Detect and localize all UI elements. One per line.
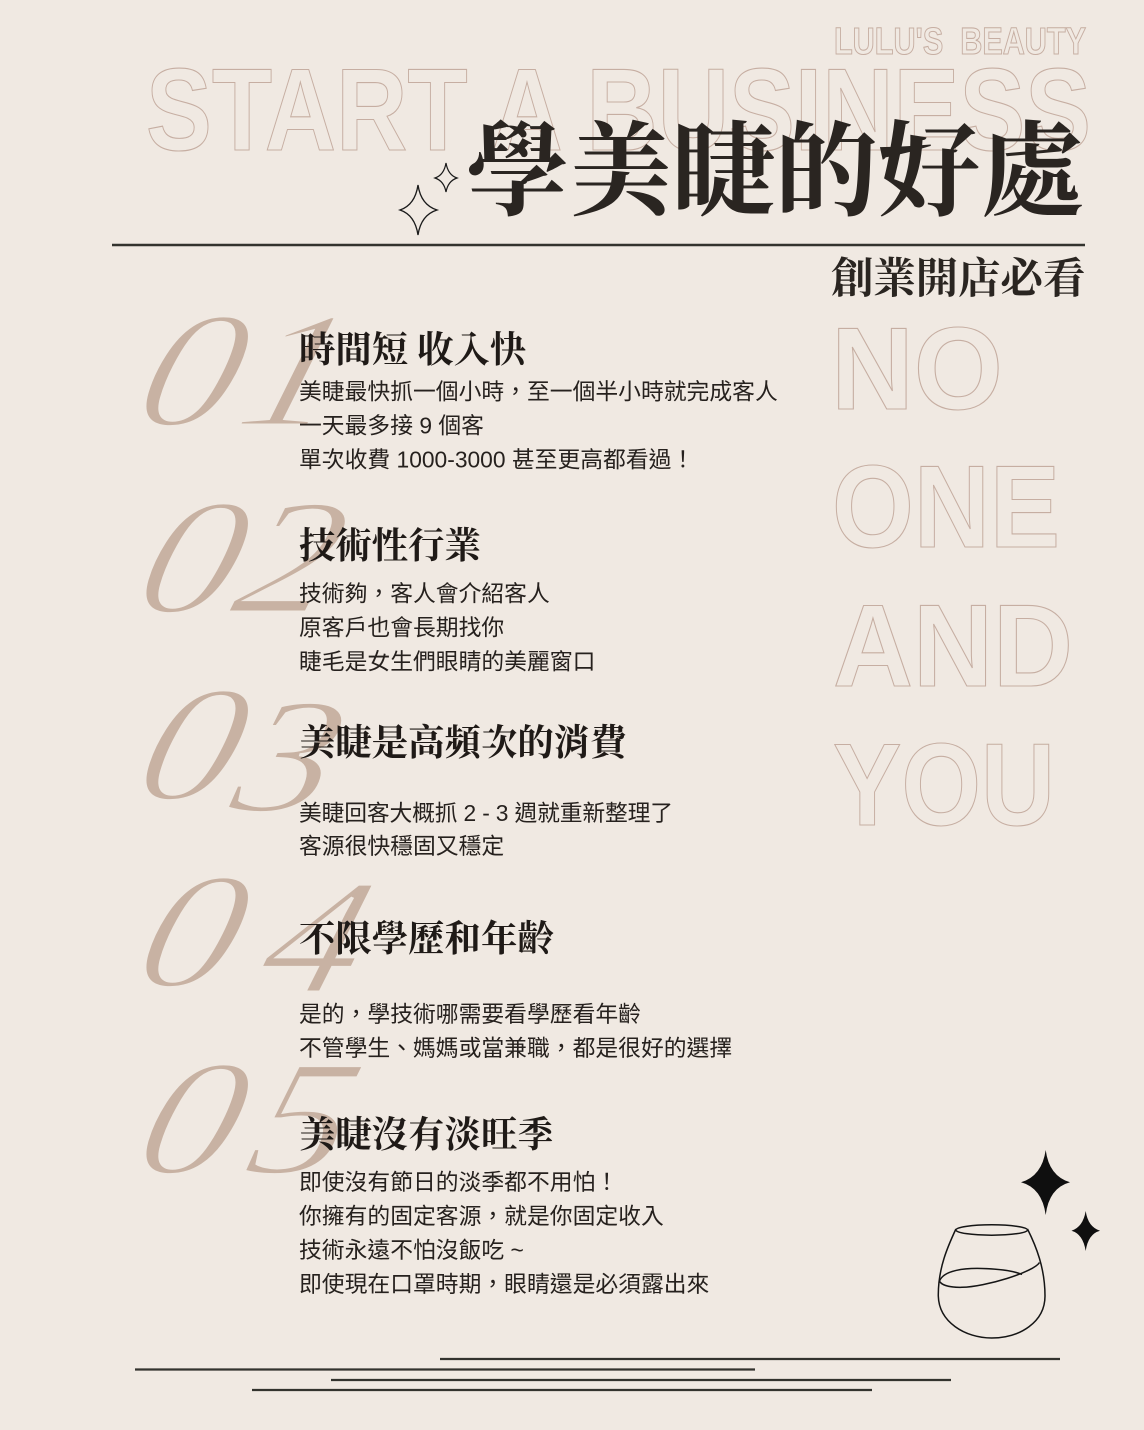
number 04: 04 bbox=[118, 840, 395, 1028]
item 3 bbox=[299, 722, 673, 859]
icon: black sparkle small bbox=[1072, 1211, 1100, 1251]
item 2 body: 原客戶也會長期找你 bbox=[299, 614, 504, 640]
icon: black sparkle large bbox=[1021, 1150, 1070, 1215]
bottom rules bbox=[135, 1359, 1060, 1390]
item 2 bbox=[299, 526, 595, 674]
number 05: 05 bbox=[120, 1027, 381, 1209]
item 3 body: 美睫回客大概抓 2 - 3 週就重新整理了 bbox=[299, 800, 673, 826]
item 2 body: 技術夠，客人會介紹客人 bbox=[299, 580, 550, 606]
item 4 body bbox=[299, 1001, 732, 1061]
item 5 heading: 美睫沒有淡旺季 bbox=[299, 1115, 555, 1155]
item 3 body: 客源很快穩固又穩定 bbox=[299, 833, 504, 859]
item 3 body bbox=[299, 800, 673, 859]
item 4 heading: 不限學歷和年齡 bbox=[299, 919, 554, 959]
item 1 body: 單次收費 1000-3000 甚至更高都看過！ bbox=[299, 446, 694, 472]
item 1 bbox=[299, 330, 778, 472]
item 4 body: 不管學生、媽媽或當兼職，都是很好的選擇 bbox=[299, 1035, 732, 1061]
item 4 body: 是的，學技術哪需要看學歷看年齡 bbox=[299, 1001, 641, 1027]
vertical outline words: NO ONE AND YOU: AND bbox=[833, 580, 1073, 711]
number 02: 02 bbox=[120, 466, 367, 648]
brand: LULU'S BEAUTY outline text: LULU'S BEAUTY bbox=[834, 21, 1086, 63]
number 01: 01 bbox=[120, 279, 372, 461]
item 5 bbox=[299, 1115, 709, 1297]
item 1 body: 美睫最快抓一個小時，至一個半小時就完成客人 bbox=[299, 378, 778, 404]
item 5 body: 技術永遠不怕沒飯吃 ~ bbox=[299, 1237, 524, 1263]
item 4 bbox=[299, 919, 732, 1061]
vertical outline words: NO ONE AND YOU: YOU bbox=[833, 719, 1055, 850]
item 5 body: 即使現在口罩時期，眼睛還是必須露出來 bbox=[299, 1271, 709, 1297]
item 1 body bbox=[299, 378, 778, 472]
icon: outline sparkle large bbox=[400, 185, 437, 235]
item 2 heading: 技術性行業 bbox=[299, 526, 486, 566]
item 2 body bbox=[299, 580, 595, 674]
item 1 heading: 時間短 收入快 bbox=[299, 330, 528, 370]
item 5 body: 即使沒有節日的淡季都不用怕！ bbox=[299, 1169, 618, 1195]
item 5 body: 你擁有的固定客源，就是你固定收入 bbox=[299, 1203, 664, 1229]
vertical outline words: NO ONE AND YOU bbox=[831, 303, 1073, 850]
title: 學美睫的好處 bbox=[464, 116, 1084, 230]
item 2 body: 睫毛是女生們眼睛的美麗窗口 bbox=[299, 648, 595, 674]
item 3 heading: 美睫是高頻次的消費 bbox=[299, 722, 631, 763]
vertical outline words: NO ONE AND YOU: NO bbox=[831, 303, 1003, 434]
subtitle: 創業開店必看 bbox=[831, 256, 1085, 303]
number 03: 03 bbox=[116, 653, 370, 847]
vertical outline words: NO ONE AND YOU: ONE bbox=[832, 441, 1060, 572]
item 1 body: 一天最多接 9 個客 bbox=[299, 412, 484, 438]
icon: glass bbox=[938, 1225, 1045, 1338]
item 5 body bbox=[299, 1169, 709, 1297]
icon: outline sparkle small bbox=[435, 163, 457, 192]
